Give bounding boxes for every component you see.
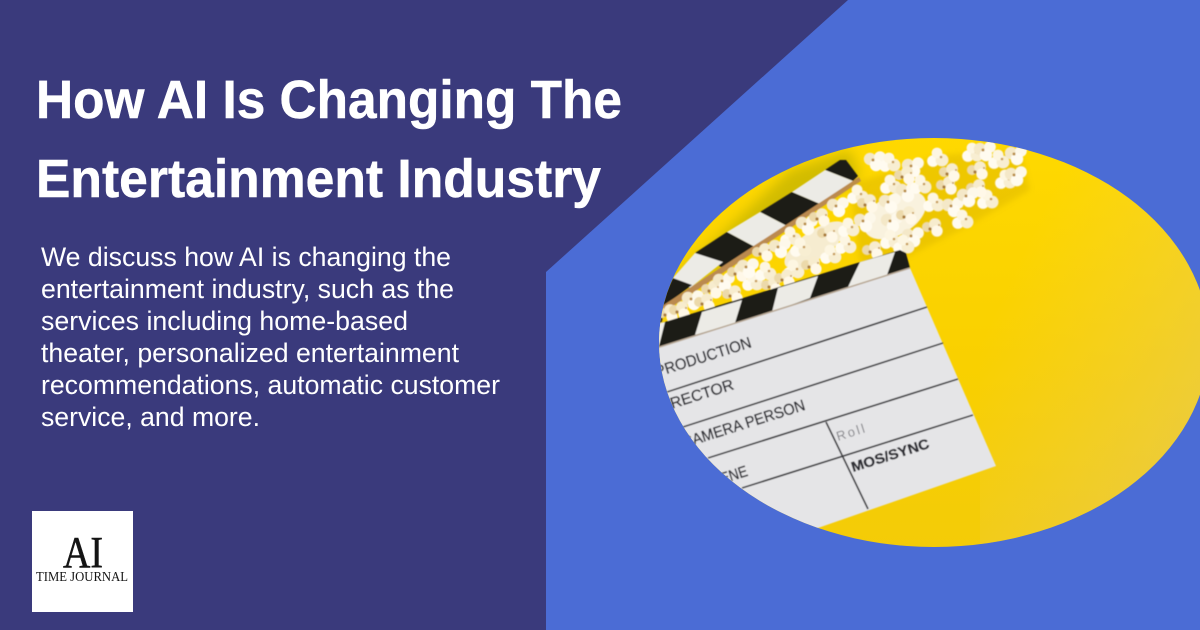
board labels — [653, 335, 931, 488]
title — [36, 70, 622, 209]
board labels: PRODUCTION — [653, 335, 754, 381]
clapper top arm — [655, 160, 861, 325]
board labels: CAMERA PERSON — [680, 397, 807, 452]
description text block: We discuss how AI is changing the — [41, 242, 451, 272]
description text block: services including home-based — [41, 306, 408, 336]
logo: AI Time Journal: AI — [63, 528, 103, 577]
board labels: ENE — [718, 463, 750, 488]
logo: AI Time Journal — [32, 511, 133, 612]
wooden hinge strip — [662, 177, 861, 312]
clapper white board — [659, 266, 996, 528]
clapper striped bar — [655, 250, 910, 349]
board labels: IRECTOR — [664, 377, 736, 414]
description text block: entertainment industry, such as the — [41, 274, 454, 304]
board labels: MOS/SYNC — [849, 435, 931, 475]
description text block: theater, personalized entertainment — [41, 338, 460, 368]
title: Entertainment Industry — [36, 149, 601, 209]
yellow backdrop — [640, 130, 1200, 555]
board labels: Roll — [834, 421, 867, 444]
description text block: service, and more. — [41, 402, 260, 432]
popcorn pile — [657, 141, 1027, 323]
panel: blue angled background — [546, 0, 1200, 630]
popcorn shadow on yellow — [850, 150, 1030, 262]
title: How AI Is Changing The — [36, 70, 622, 130]
board ruled lines — [667, 307, 973, 509]
description text block: recommendations, automatic customer — [41, 370, 500, 400]
logo: AI Time Journal: TIME JOURNAL — [36, 569, 128, 584]
photo: clapperboard and popcorn in oval — [659, 138, 1200, 547]
description text block — [41, 242, 500, 432]
